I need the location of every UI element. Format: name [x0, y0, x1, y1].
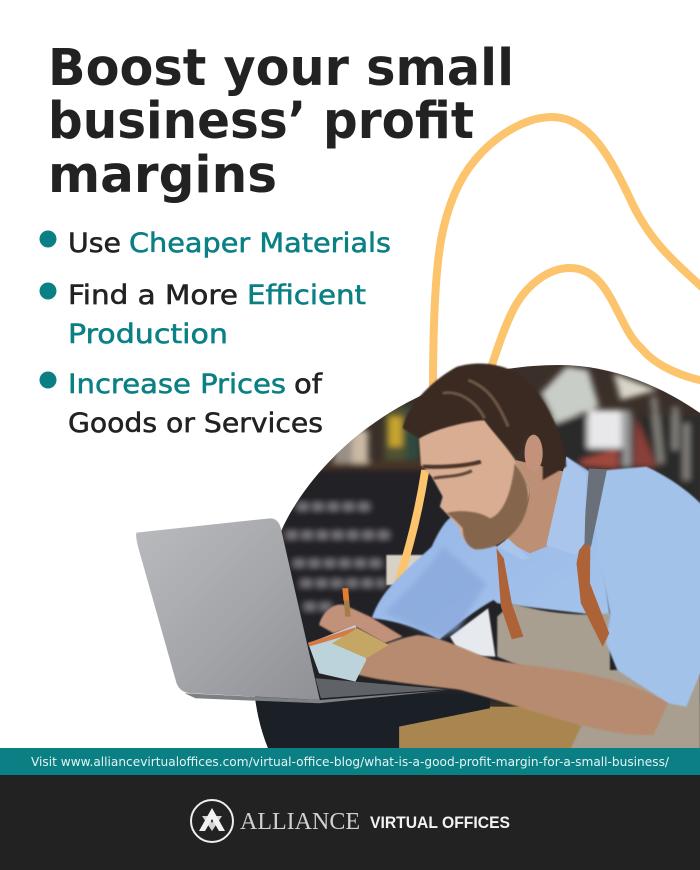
forearm and hand: [354, 635, 668, 735]
neck: [505, 460, 568, 553]
bullet 2: Efficient: [247, 280, 366, 311]
eye and brow: [423, 462, 481, 478]
bullet list: [40, 228, 391, 439]
beard: [446, 463, 528, 549]
collar: [497, 457, 586, 560]
yellow curve over background: [398, 470, 425, 582]
glass and paper behind the arm: [386, 555, 495, 657]
title: Boost your small: [48, 39, 514, 98]
logo subtitle: VIRTUAL OFFICES: [370, 814, 510, 832]
hair highlight: [443, 380, 508, 427]
cafe background: [240, 360, 700, 750]
ear: [525, 435, 543, 472]
photo: man working on a laptop: [136, 360, 700, 750]
bullet 2: Find a More: [68, 280, 238, 311]
bullet 3: [40, 369, 324, 439]
bullet 2: [40, 280, 366, 350]
shirt torso and near sleeve: [372, 457, 610, 640]
bullet 3: Increase Prices: [68, 369, 286, 400]
writing hand: [319, 605, 403, 643]
bullet 1: Use: [68, 228, 121, 259]
logo mark: [191, 800, 233, 842]
title: margins: [48, 146, 277, 205]
laptop: [136, 518, 450, 703]
face: [419, 420, 530, 549]
url banner: [0, 748, 700, 775]
logo wordmark: ALLIANCE: [240, 809, 360, 835]
footer band: [0, 775, 700, 870]
sleeve shadow: [385, 547, 486, 638]
title: business’ profit: [48, 92, 474, 151]
bullet 3: Goods or Services: [68, 408, 323, 439]
apron straps: [497, 468, 609, 647]
hair: [403, 363, 566, 480]
notebook: [308, 625, 389, 682]
bullet 3: of: [294, 369, 324, 400]
decorative yellow curves: [433, 117, 700, 390]
counter and table: [250, 693, 581, 750]
man: [136, 363, 700, 750]
bullet 2: Production: [68, 319, 228, 350]
pencil: [343, 588, 351, 617]
far sleeve: [589, 467, 700, 707]
logo: [191, 800, 510, 842]
bullet 1: Cheaper Materials: [129, 228, 391, 259]
apron: [497, 603, 700, 750]
title: [48, 39, 514, 205]
url banner: Visit www.alliancevirtualoffices.com/virtual-office-blog/what-is-a-good-profit-margin-for-a-small-business/: [31, 754, 670, 769]
